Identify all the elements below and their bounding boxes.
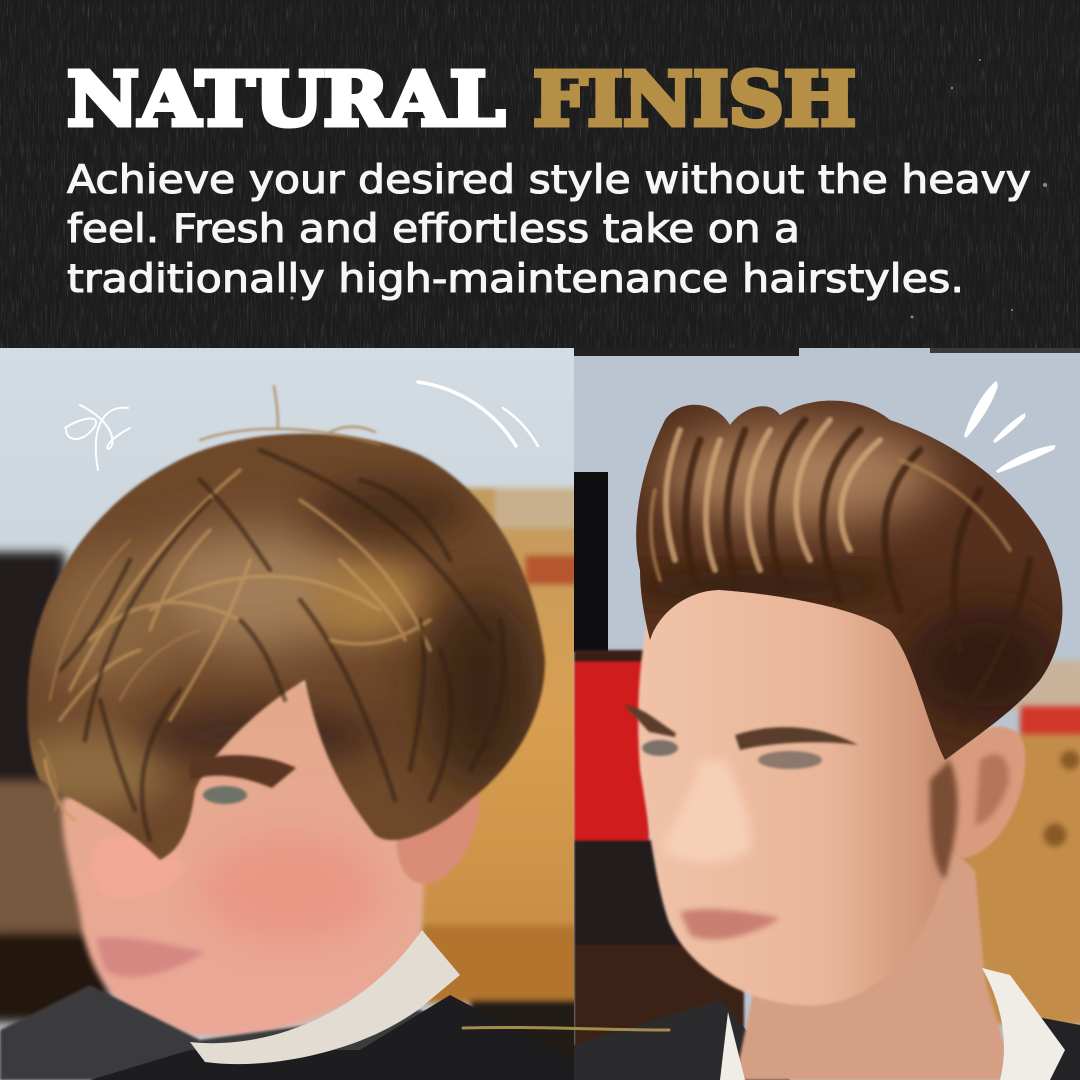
brows and eyes [630,708,858,769]
wood right [940,660,1080,1025]
title word: NATURAL: NATURAL [67,57,505,143]
face [62,680,430,1036]
wall [574,348,1080,1080]
eye and brow under hair [190,755,296,804]
icon: white swoosh lines [418,382,538,446]
icon: white burst lines [964,381,1055,473]
black panel [574,472,608,652]
styled hair strands [651,420,1030,720]
divider underline in gold [463,1027,669,1030]
description text: feel. Fresh and effortless take on a [67,207,800,252]
title word: FINISH: FINISH [533,57,856,143]
wall [0,348,574,1080]
dark shelf left [0,552,110,1022]
collar [720,968,1065,1080]
hair mass [10,434,545,860]
nose [94,836,182,896]
description text: Achieve your desired style without the heavy [67,158,1031,203]
messy hair strands [40,386,504,840]
neck [738,849,1004,1080]
hair mass [620,401,1065,760]
nose [662,760,751,863]
cape [574,1000,790,1080]
panel: after photo, styled hair [574,348,1080,1080]
title [67,57,856,143]
description text [67,158,1031,302]
ear [945,727,1025,858]
face [638,580,955,1005]
wood panel [420,488,580,1080]
side shadow and sideburn [930,760,958,880]
collar [190,930,460,1064]
icon: white flourish [65,405,130,470]
cape [0,984,425,1080]
panel: before photo, messy hair [0,348,580,1080]
lips [680,909,780,940]
panel: chalkboard header background [0,0,1080,348]
lips [96,937,205,977]
ear [396,792,480,884]
description text: traditionally high-maintenance hairstyles. [67,257,964,302]
red panel [574,650,744,1080]
